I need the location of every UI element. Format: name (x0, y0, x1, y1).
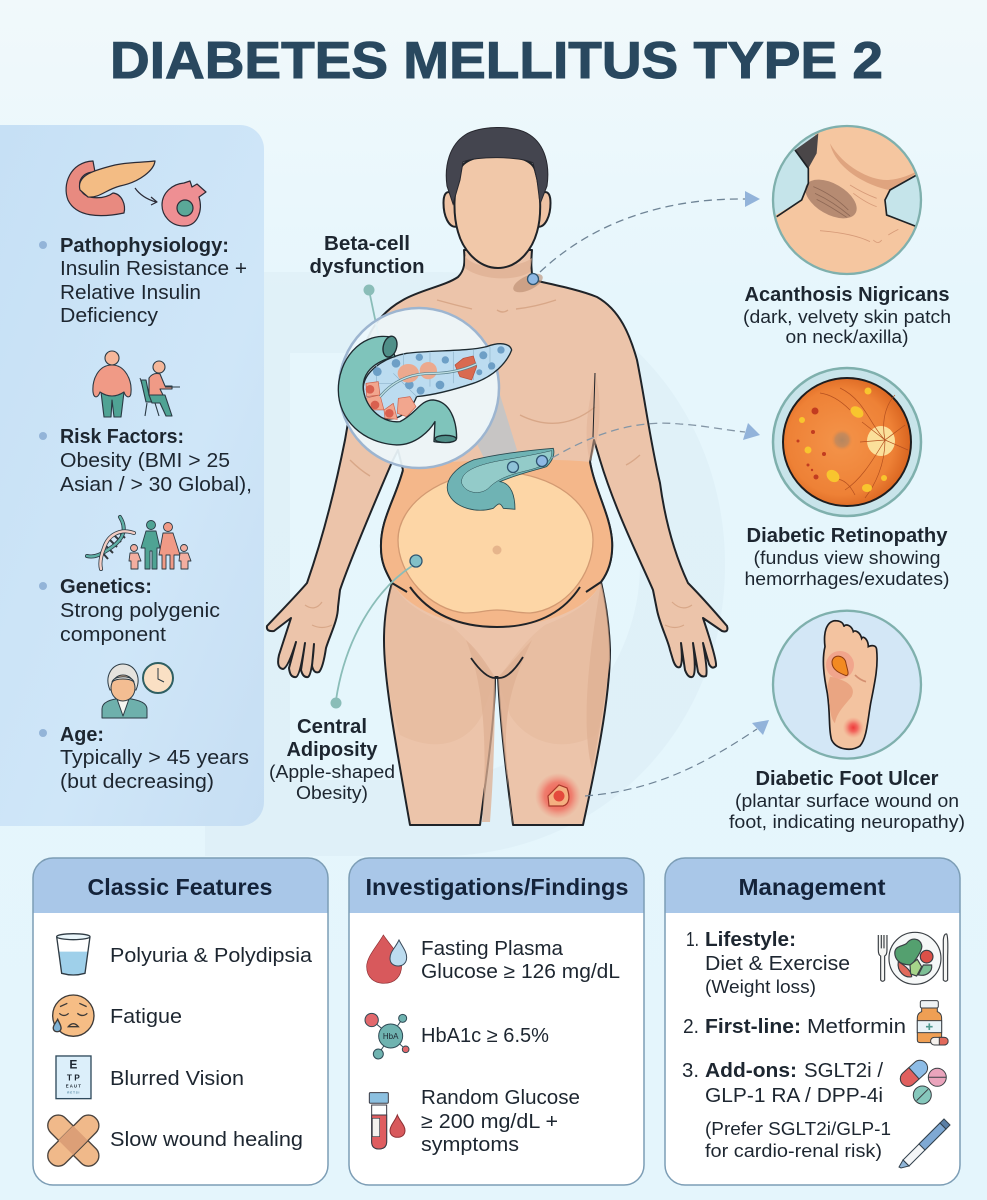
text: diabetic foot ulcer: foot, indicating neuropathy) (729, 812, 965, 832)
icon: hba1c molecule: HbA (383, 1032, 399, 1041)
bullet: risk factors (39, 432, 47, 440)
icon: eye chart: R E T S I (67, 1091, 80, 1095)
list: investigations: ≥ 200 mg/dL + (421, 1111, 558, 1133)
text: risk factors: Asian / > 30 Global), (60, 474, 252, 496)
list: lifestyle: Lifestyle: (705, 929, 796, 951)
text: beta-cell dysfunction: Beta-cell (324, 233, 410, 255)
text: pathophysiology (60, 235, 247, 327)
list: first-line: Metformin (807, 1016, 906, 1038)
list: classic features: Polyuria & Polydipsia (110, 945, 313, 967)
text: acanthosis nigricans (743, 284, 951, 347)
panel header (349, 858, 644, 913)
icon: diabetic foot circle (773, 611, 921, 759)
text: diabetic foot ulcer: Diabetic Foot Ulcer (756, 768, 939, 790)
list: add-ons: 3. (682, 1060, 699, 1082)
icon: bandage (44, 1111, 103, 1170)
text: age: (but decreasing) (60, 771, 214, 793)
icon: assorted pills (897, 1057, 946, 1104)
body shading (385, 256, 610, 825)
bullet: genetics (39, 582, 47, 590)
central adiposity visceral fat (398, 472, 593, 613)
list: investigations: Random Glucose (421, 1087, 580, 1109)
panel: management (665, 858, 960, 1185)
text: risk factors: Obesity (BMI > 25 (60, 450, 230, 472)
text: genetics: component (60, 624, 166, 646)
heading: Investigations/Findings (366, 874, 628, 900)
central adiposity dot (330, 698, 342, 708)
text: pathophysiology: Pathophysiology: (60, 235, 229, 257)
face (454, 155, 540, 268)
text: central adiposity: Central (297, 716, 367, 738)
text: genetics: Genetics: (60, 576, 152, 598)
text: pathophysiology: Relative Insulin (60, 282, 201, 304)
icon: blood and water drops (367, 935, 407, 983)
title: DIABETES MELLITUS TYPE 2 (110, 32, 883, 90)
text: diabetic retinopathy: hemorrhages/exudates) (744, 569, 950, 589)
text: risk factors (60, 426, 252, 496)
small pancreas (447, 448, 554, 510)
text: acanthosis nigricans: Acanthosis Nigricans (744, 284, 950, 306)
list: lifestyle: 1. (686, 929, 699, 951)
icon: eye chart: E (69, 1058, 77, 1072)
panel: investigations and findings (349, 858, 644, 1185)
icon: dna and family (87, 517, 191, 569)
icon: pancreas and beta cell (66, 161, 206, 226)
icon: obese person and sedentary person (93, 351, 180, 417)
duodenum (338, 336, 457, 445)
text: diabetic foot ulcer: (plantar surface wound on (735, 791, 959, 811)
icon: blood test tube (369, 1093, 405, 1149)
body silhouette (267, 250, 727, 825)
leg ulcer (535, 773, 581, 819)
list: add-ons (682, 1060, 883, 1107)
note: prefer sglt2i (705, 1119, 891, 1161)
list: investigations: HbA1c ≥ 6.5% (421, 1025, 549, 1047)
text: age (60, 724, 249, 793)
icon: retina fundus circle (773, 368, 921, 516)
list: classic features: Slow wound healing (110, 1129, 303, 1151)
hair (446, 127, 548, 204)
list: first-line (683, 1016, 906, 1038)
panel header (665, 858, 960, 913)
palm creases (305, 602, 692, 628)
icon: eye chart: T P (67, 1072, 80, 1082)
heading: Management (738, 874, 886, 900)
text: diabetic foot ulcer (729, 768, 965, 832)
text: pathophysiology: Deficiency (60, 305, 158, 327)
text: acanthosis nigricans: (dark, velvety skin patch (743, 307, 951, 327)
list: add-ons: SGLT2i / (804, 1060, 883, 1082)
icon: tired face (53, 995, 94, 1036)
arrow: neck to acanthosis (540, 191, 760, 272)
panel: classic features (33, 858, 328, 1185)
ears (444, 192, 550, 227)
list: investigations (421, 938, 620, 1156)
arrow: leg ulcer to foot (585, 720, 769, 796)
panel header (33, 858, 328, 913)
icon: eye chart (56, 1056, 91, 1099)
text: age: Age: (60, 724, 104, 746)
list: first-line: 2. (683, 1016, 699, 1038)
human body figure (267, 127, 727, 825)
text: diabetic retinopathy (744, 525, 950, 589)
belly fat band (381, 460, 612, 627)
icon: plate of salad with cutlery (878, 932, 948, 984)
text: diabetic retinopathy: Diabetic Retinopathy (746, 525, 948, 547)
bullet: pathophysiology (39, 241, 47, 249)
groin lines (471, 657, 523, 678)
callout line: central adiposity (336, 566, 412, 700)
belly outline (381, 462, 612, 627)
acanthosis neck patch (511, 270, 545, 296)
text: risk factors: Risk Factors: (60, 426, 184, 448)
callout dots (410, 274, 548, 567)
list: lifestyle: (Weight loss) (705, 977, 816, 997)
watermark logo (205, 272, 725, 856)
heading: Classic Features (88, 874, 272, 900)
text: pathophysiology: Insulin Resistance + (60, 258, 247, 280)
list: investigations: Fasting Plasma (421, 938, 564, 960)
icon: hba1c molecule (365, 1013, 409, 1059)
islet acinar cells (363, 344, 512, 419)
text: beta-cell dysfunction (310, 233, 424, 278)
note: prefer sglt2i: for cardio-renal risk) (705, 1141, 882, 1161)
text: central adiposity: (Apple-shaped (269, 762, 395, 782)
list: add-ons: Add-ons: (705, 1060, 797, 1082)
panel: risk factors sidebar (0, 125, 264, 826)
magnified pancreas lens (338, 308, 512, 468)
list: lifestyle: Diet & Exercise (705, 953, 850, 975)
icon: water glass (57, 934, 90, 975)
icon: elderly person and clock (102, 663, 173, 718)
beta cell callout dot (364, 284, 374, 296)
text: central adiposity (269, 716, 395, 803)
arrow: pancreas to retinopathy (552, 423, 760, 458)
text: central adiposity: Obesity) (296, 783, 368, 803)
list: investigations: Glucose ≥ 126 mg/dL (421, 961, 620, 983)
text: genetics: Strong polygenic (60, 600, 220, 622)
text: central adiposity: Adiposity (286, 739, 378, 761)
chest and limb contour lines (350, 300, 640, 476)
icon: acanthosis nigricans neck circle (772, 124, 922, 276)
text: acanthosis nigricans: on neck/axilla) (786, 327, 908, 347)
list: classic features: Blurred Vision (110, 1068, 244, 1090)
list: classic features (110, 945, 313, 1151)
lens beam (477, 395, 517, 470)
list: lifestyle (686, 929, 850, 997)
bullet: age (39, 729, 47, 737)
text: beta-cell dysfunction: dysfunction (310, 256, 424, 278)
text: genetics (60, 576, 220, 646)
icon: eye chart: E A U T (66, 1084, 81, 1089)
list: first-line: First-line: (705, 1016, 801, 1038)
list: classic features: Fatigue (110, 1006, 182, 1028)
icon: pill bottle (917, 1001, 948, 1045)
callout line: beta cell (369, 290, 385, 367)
icon: insulin pen (899, 1119, 950, 1168)
list: investigations: symptoms (421, 1134, 519, 1156)
list: add-ons: GLP-1 RA / DPP-4i (705, 1085, 883, 1107)
note: prefer sglt2i: (Prefer SGLT2i/GLP-1 (705, 1119, 891, 1139)
navel (492, 546, 502, 554)
text: age: Typically > 45 years (60, 747, 249, 769)
text: diabetic retinopathy: (fundus view showing (754, 548, 940, 568)
